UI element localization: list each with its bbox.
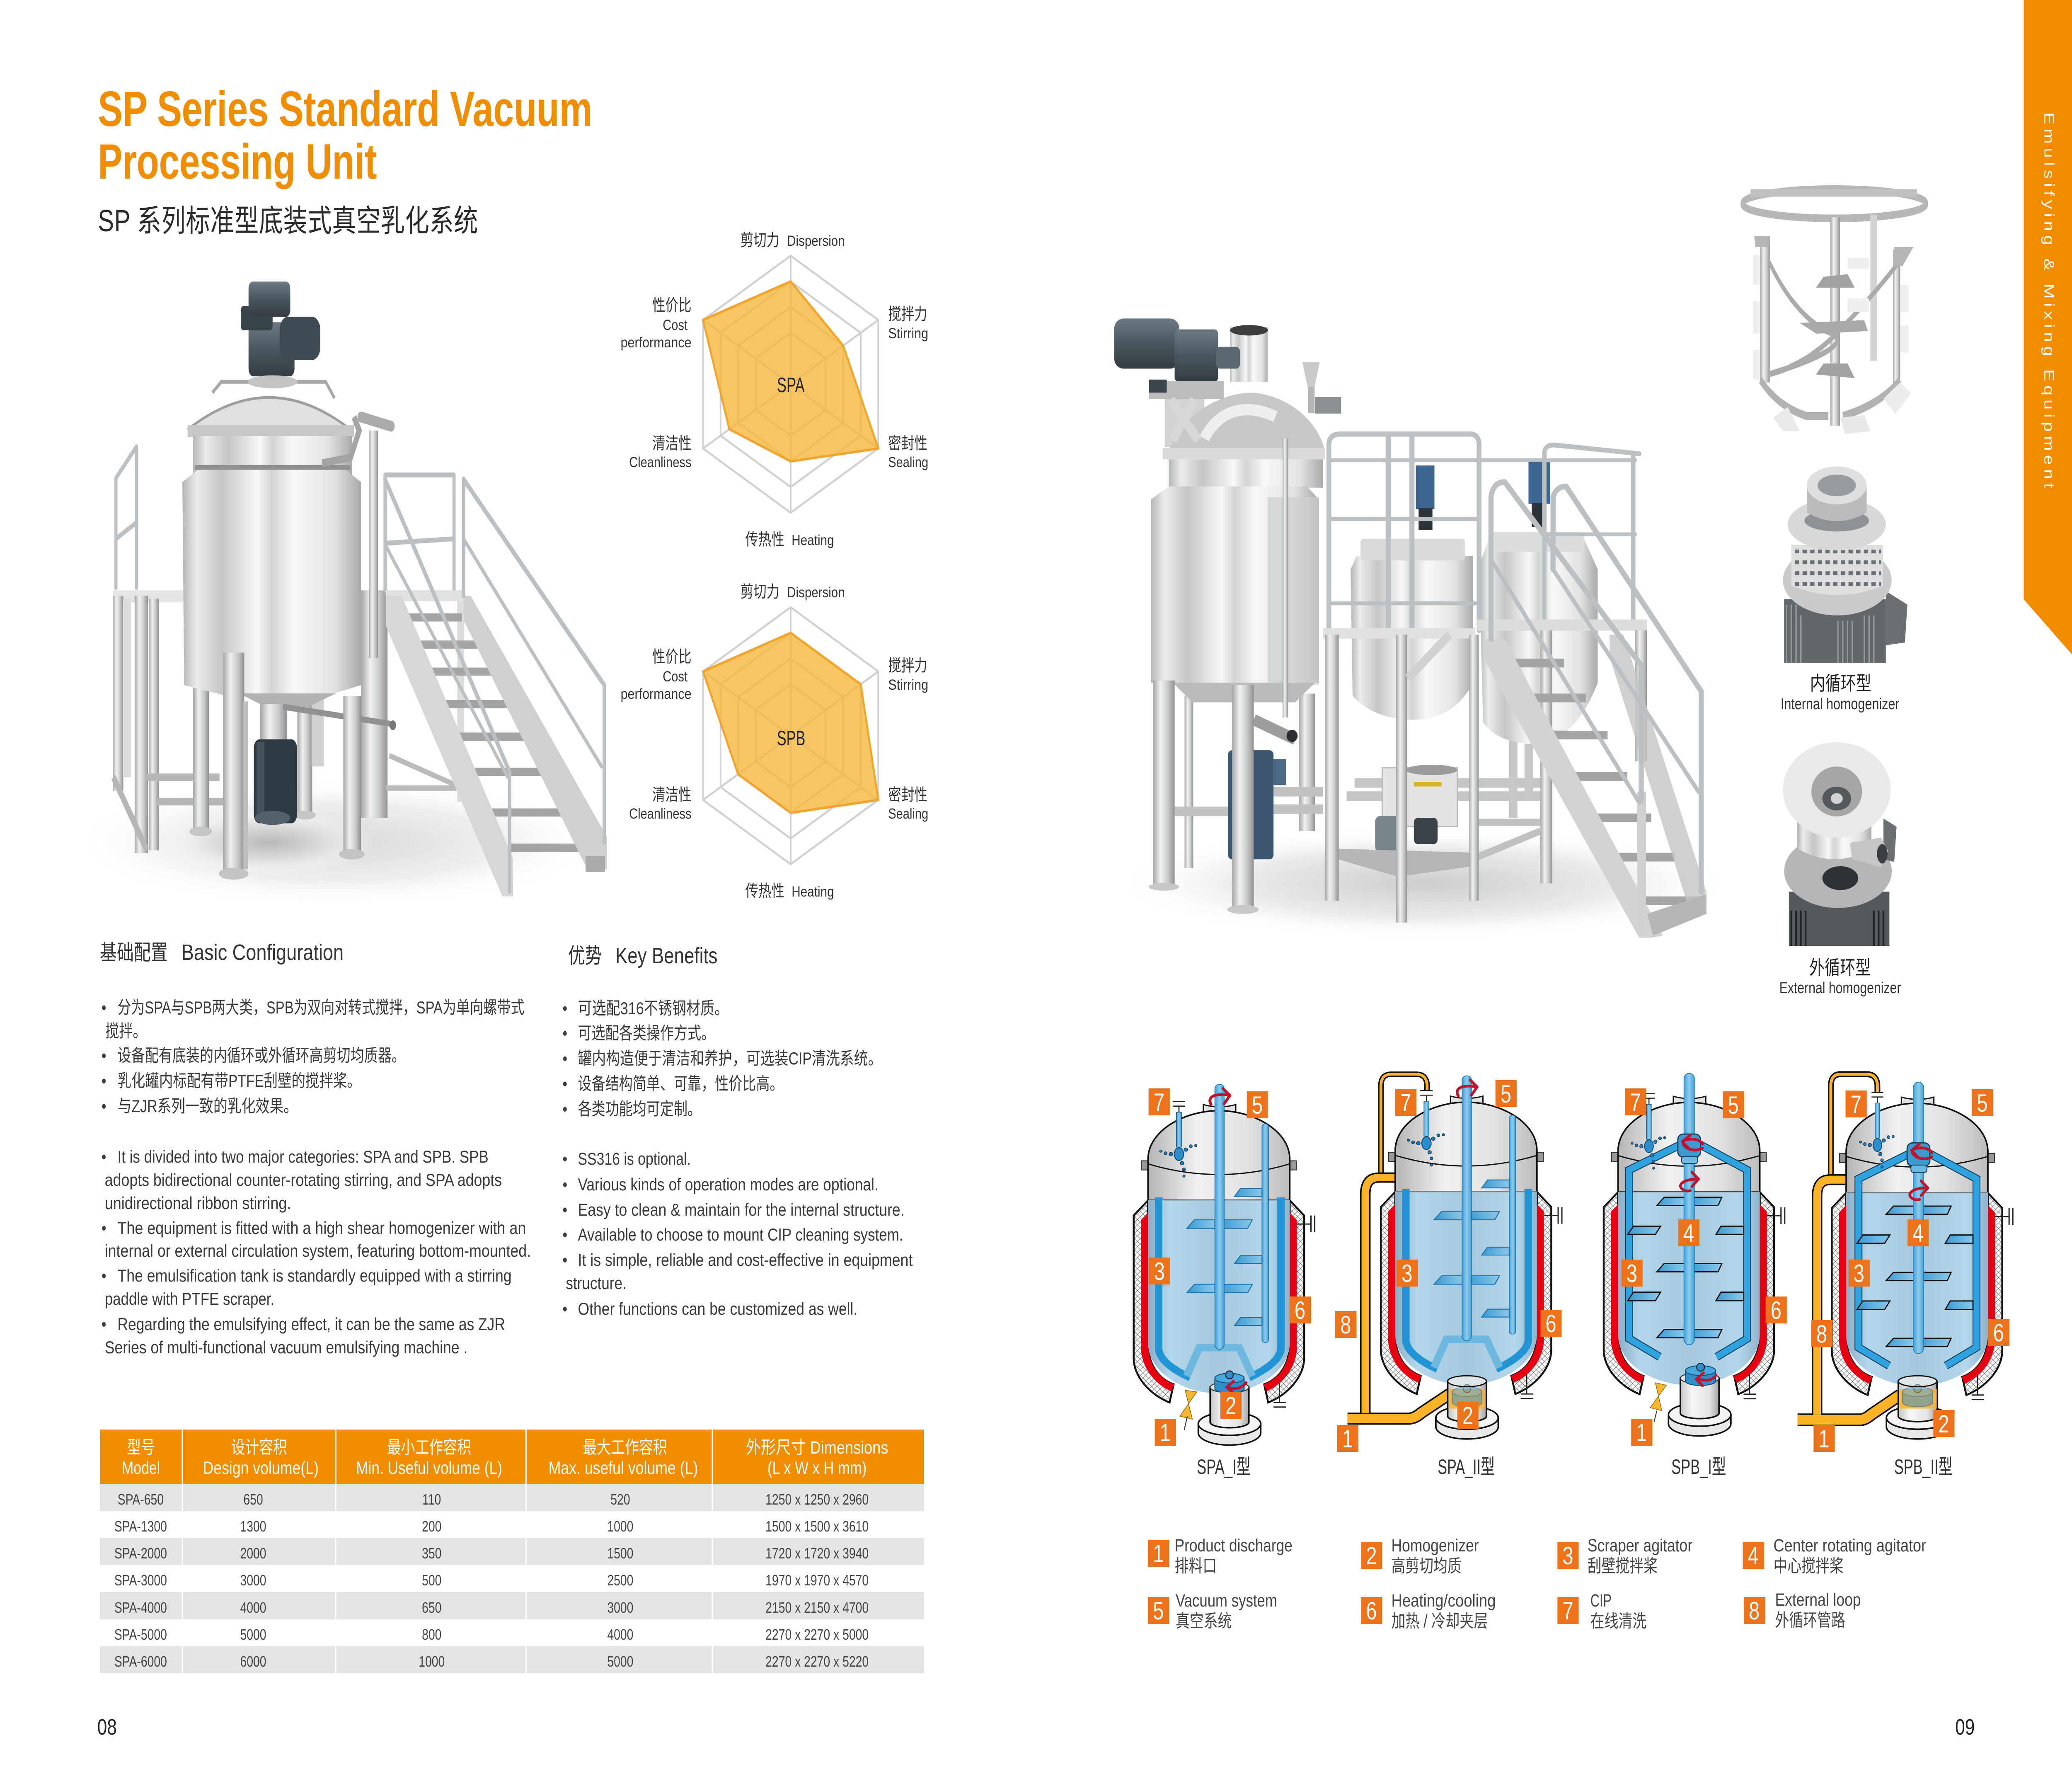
label SPA_I: SPA_I型 bbox=[1197, 1455, 1251, 1478]
table header: Design volume(L) bbox=[203, 1458, 319, 1478]
table row SPA-2000: 350 bbox=[422, 1545, 441, 1562]
axis labels SPA: Heating bbox=[792, 532, 834, 548]
text block: basic configuration Chinese: • bbox=[102, 1071, 106, 1091]
legend item 1 bbox=[1148, 1536, 1293, 1576]
text block: basic configuration English: The equipment is fitted with a high shear homogenizer with an bbox=[117, 1219, 526, 1238]
diagram: SPA_I bbox=[1134, 1084, 1315, 1478]
table row SPA-650: 650 bbox=[243, 1491, 263, 1508]
tank internals SPA_I bbox=[1159, 1084, 1281, 1445]
number tags SPB_II bbox=[1811, 1089, 2009, 1453]
number tags SPA_II: 1 bbox=[1342, 1425, 1353, 1453]
label SPA_II: SPA_II型 bbox=[1438, 1455, 1495, 1478]
number tags SPB_I: 4 bbox=[1683, 1220, 1694, 1247]
axis labels SPA: 清洁性 bbox=[652, 434, 692, 453]
text block: basic configuration Chinese: 乳化罐内标配有带PTFE刮壁的搅拌桨。 bbox=[117, 1071, 361, 1091]
text block: key benefits English: • bbox=[562, 1200, 567, 1220]
text block: key benefits Chinese: 设备结构简单、可靠，性价比高。 bbox=[578, 1074, 784, 1094]
number tags SPA_I: 2 bbox=[1225, 1392, 1236, 1420]
text block: basic configuration English bbox=[102, 1147, 531, 1357]
legend item 6: 6 bbox=[1366, 1597, 1377, 1625]
external loop pipe SPB_II bbox=[1798, 1074, 1900, 1420]
legend item 5: 5 bbox=[1153, 1597, 1164, 1625]
table row SPA-1300: 1300 bbox=[240, 1518, 266, 1535]
table row SPA-6000: 2270 x 2270 x 5220 bbox=[765, 1653, 869, 1670]
chart name SPA: SPA bbox=[777, 373, 805, 397]
table header: Min. Useful volume (L) bbox=[356, 1458, 502, 1478]
axis labels SPA: Cleanliness bbox=[629, 454, 692, 470]
axis labels SPB: Sealing bbox=[888, 805, 928, 822]
table row SPA-1300: 200 bbox=[422, 1518, 441, 1535]
number tags SPB_II: 8 bbox=[1816, 1321, 1827, 1348]
axis labels SPA: 密封性 bbox=[888, 434, 927, 453]
tank shell SPA_II bbox=[1381, 1096, 1562, 1398]
table row SPA-2000: 1720 x 1720 x 3940 bbox=[765, 1545, 869, 1562]
table row SPA-5000: SPA-5000 bbox=[114, 1626, 167, 1643]
legend item 2 bbox=[1361, 1536, 1479, 1576]
text block: key benefits English: • bbox=[562, 1149, 567, 1169]
number tags SPA_II bbox=[1335, 1080, 1562, 1453]
axis labels SPB: 传热性 bbox=[745, 881, 784, 900]
radar area SPA bbox=[703, 281, 878, 461]
label: internal homogenizer: 内循环型 bbox=[1810, 673, 1871, 694]
label: internal homogenizer: Internal homogenizer bbox=[1781, 695, 1899, 713]
legend item 6 bbox=[1361, 1591, 1496, 1631]
table header: 最大工作容积 bbox=[583, 1438, 667, 1458]
text block: key benefits Chinese: • bbox=[562, 1074, 567, 1094]
label SPB_II: SPB_II型 bbox=[1894, 1455, 1953, 1478]
axis labels SPB: Stirring bbox=[888, 676, 928, 693]
table header: 外形尺寸 Dimensions bbox=[746, 1438, 888, 1458]
heading: Key Benefits bbox=[568, 943, 717, 968]
text block: basic configuration English: paddle with PTFE scraper. bbox=[105, 1289, 274, 1309]
legend item 5 bbox=[1148, 1591, 1277, 1631]
chart name SPB: SPB bbox=[777, 726, 805, 750]
axis labels SPB: 搅拌力 bbox=[888, 656, 927, 675]
table row SPA-3000: SPA-3000 bbox=[114, 1572, 167, 1589]
table header: 设计容积 bbox=[231, 1438, 287, 1458]
table row SPA-4000 bbox=[114, 1599, 869, 1616]
table row SPA-4000: 3000 bbox=[607, 1599, 633, 1616]
text block: basic configuration English: unidirectional ribbon stirring. bbox=[105, 1194, 291, 1213]
legend item 7: CIP bbox=[1590, 1591, 1612, 1611]
legend item 7: 7 bbox=[1562, 1597, 1573, 1625]
tank shell SPA_I bbox=[1134, 1105, 1315, 1407]
tank shell SPB_I bbox=[1604, 1096, 1785, 1399]
text block: basic configuration English: • bbox=[102, 1219, 106, 1238]
table row backgrounds bbox=[100, 1484, 924, 1673]
number tags SPB_I: 7 bbox=[1630, 1089, 1641, 1116]
axis labels SPB: Dispersion bbox=[787, 584, 845, 601]
legend item 1: Product discharge bbox=[1175, 1536, 1293, 1556]
axis labels SPA bbox=[621, 230, 928, 549]
label: internal homogenizer bbox=[1781, 673, 1899, 713]
legend item 3: 3 bbox=[1562, 1542, 1573, 1570]
legend item 4: 中心搅拌桨 bbox=[1774, 1556, 1844, 1576]
table row SPA-3000: 3000 bbox=[240, 1572, 266, 1589]
table row SPA-3000 bbox=[114, 1572, 869, 1589]
specification table bbox=[100, 1430, 924, 1673]
axis labels SPB bbox=[621, 582, 928, 900]
radar chart: SPB bbox=[621, 582, 928, 900]
table header: 最小工作容积 bbox=[387, 1438, 471, 1458]
axis labels SPB: Cleanliness bbox=[629, 805, 692, 822]
number tags SPB_II: 4 bbox=[1912, 1220, 1923, 1247]
axis labels SPA: 性价比 bbox=[652, 296, 692, 315]
text block: key benefits Chinese: • bbox=[562, 1024, 567, 1043]
axis labels SPA: 传热性 bbox=[745, 530, 784, 549]
table row SPA-3000: 500 bbox=[422, 1572, 441, 1589]
axis labels SPA: 搅拌力 bbox=[888, 304, 927, 323]
tank internals SPB_II bbox=[1857, 1082, 1976, 1439]
number tags SPA_I: 3 bbox=[1154, 1258, 1165, 1285]
external loop pipe SPA_II bbox=[1348, 1074, 1450, 1419]
text block: key benefits English: Other functions can be customized as well. bbox=[578, 1299, 857, 1319]
number tags SPB_II: 5 bbox=[1977, 1090, 1988, 1117]
text block: key benefits English: • bbox=[562, 1299, 567, 1319]
text block: basic configuration Chinese: 与ZJR系列一致的乳化效果。 bbox=[117, 1097, 298, 1116]
number tags SPA_II: 7 bbox=[1400, 1089, 1411, 1117]
number tags SPA_I bbox=[1149, 1088, 1311, 1447]
text block: key benefits Chinese: 可选配316不锈钢材质。 bbox=[578, 999, 729, 1018]
legend item 6: Heating/cooling bbox=[1391, 1591, 1496, 1611]
number tags SPA_II: 3 bbox=[1402, 1260, 1412, 1287]
number tags SPB_I: 6 bbox=[1771, 1297, 1782, 1324]
text block: basic configuration Chinese: 分为SPA与SPB两大类，SPB为双向对转式搅拌，SPA为单向螺带式 bbox=[117, 998, 524, 1018]
table row SPA-6000: 5000 bbox=[607, 1653, 633, 1670]
axis labels SPB: 剪切力 bbox=[741, 582, 779, 601]
number tags SPB_II: 2 bbox=[1938, 1410, 1949, 1438]
legend item 7: 在线清洗 bbox=[1590, 1612, 1646, 1631]
diagram: SPA_II bbox=[1335, 1074, 1562, 1478]
legend item 8 bbox=[1744, 1590, 1861, 1631]
radar grid SPB bbox=[703, 607, 878, 864]
text block: basic configuration English: • bbox=[102, 1315, 106, 1334]
text block: key benefits Chinese: • bbox=[562, 1100, 567, 1119]
diagram: SPB_I bbox=[1604, 1073, 1787, 1478]
axis labels SPA: Sealing bbox=[888, 454, 928, 470]
table row SPA-650: 1250 x 1250 x 2960 bbox=[765, 1491, 869, 1508]
legend item 2: 高剪切均质 bbox=[1391, 1556, 1462, 1576]
title: SP Series Standard Vacuum bbox=[98, 81, 592, 137]
number tags SPB_I: 1 bbox=[1636, 1419, 1647, 1447]
text block: key benefits English: • bbox=[562, 1225, 567, 1245]
number tags SPB_I: 3 bbox=[1627, 1260, 1637, 1287]
heading: Basic Configuration: 基础配置 bbox=[100, 940, 168, 964]
text block: basic configuration Chinese: • bbox=[102, 1097, 106, 1116]
title bbox=[98, 81, 592, 189]
text block: key benefits English: structure. bbox=[566, 1274, 627, 1293]
table header bbox=[100, 1430, 924, 1484]
number tags SPB_II: 6 bbox=[1993, 1319, 2004, 1347]
table header: Model bbox=[122, 1458, 160, 1478]
text block: basic configuration Chinese: 搅拌。 bbox=[105, 1022, 147, 1041]
table row SPA-5000: 4000 bbox=[607, 1626, 633, 1643]
product photo: SP unit with side tanks and stairs bbox=[1113, 318, 1738, 940]
legend item 2: 2 bbox=[1366, 1542, 1377, 1570]
legend item 4: Center rotating agitator bbox=[1774, 1536, 1926, 1556]
side tab bbox=[2024, 0, 2072, 654]
radar chart: SPA bbox=[621, 230, 928, 549]
table row SPA-5000: 2270 x 2270 x 5000 bbox=[765, 1626, 869, 1643]
axis labels SPB: 清洁性 bbox=[652, 785, 692, 804]
text block: basic configuration English: The emulsification tank is standardly equipped with a stirring bbox=[117, 1266, 512, 1286]
table row SPA-4000: 650 bbox=[422, 1599, 441, 1616]
text block: key benefits Chinese: • bbox=[562, 1049, 567, 1069]
table row SPA-3000: 1970 x 1970 x 4570 bbox=[765, 1572, 869, 1589]
axis labels SPB: 密封性 bbox=[888, 785, 927, 804]
number tags SPA_I: 7 bbox=[1154, 1089, 1164, 1116]
axis labels SPA: performance bbox=[621, 334, 692, 351]
tank internals SPB_I bbox=[1628, 1073, 1747, 1436]
text block: basic configuration English: It is divided into two major categories: SPA and SPB. SPB bbox=[117, 1147, 489, 1167]
text block: key benefits Chinese: 可选配各类操作方式。 bbox=[578, 1024, 715, 1043]
legend item 7 bbox=[1557, 1591, 1646, 1631]
number tags SPA_II: 2 bbox=[1462, 1402, 1473, 1430]
legend item 8: External loop bbox=[1775, 1590, 1861, 1610]
table row SPA-1300: 1000 bbox=[607, 1518, 633, 1535]
label SPB_I: SPB_I型 bbox=[1671, 1455, 1726, 1478]
side tab label: Emulsifying & Mixing Equipment bbox=[2041, 112, 2057, 488]
legend item 8: 外循环管路 bbox=[1775, 1611, 1845, 1631]
legend bbox=[1148, 1536, 1926, 1631]
axis labels SPB: performance bbox=[621, 686, 692, 702]
table row SPA-5000: 800 bbox=[422, 1626, 441, 1643]
axis labels SPA: Stirring bbox=[888, 325, 928, 342]
legend item 4 bbox=[1743, 1536, 1926, 1576]
legend item 3 bbox=[1557, 1536, 1692, 1576]
table row SPA-6000: SPA-6000 bbox=[114, 1653, 167, 1670]
legend item 5: 真空系统 bbox=[1176, 1612, 1232, 1631]
text block: basic configuration English: Regarding the emulsifying effect, it can be the same as ZJR bbox=[117, 1315, 505, 1334]
number tags SPB_II: 3 bbox=[1854, 1260, 1864, 1287]
table row SPA-650 bbox=[118, 1491, 869, 1508]
text block: key benefits Chinese: 罐内构造便于清洁和养护，可选装CIP清洗系统。 bbox=[578, 1049, 882, 1069]
heading: Key Benefits: Key Benefits bbox=[615, 943, 717, 968]
product photo: agitator paddle bbox=[1742, 189, 1927, 434]
text block: key benefits English: SS316 is optional. bbox=[578, 1149, 691, 1169]
table header: Max. useful volume (L) bbox=[549, 1458, 698, 1478]
axis labels SPA: Cost bbox=[663, 317, 687, 333]
legend item 4: 4 bbox=[1748, 1542, 1759, 1570]
table row SPA-4000: 2150 x 2150 x 4700 bbox=[765, 1599, 869, 1616]
heading: Basic Configuration: Basic Configuration bbox=[182, 940, 344, 965]
text block: basic configuration English: • bbox=[102, 1266, 106, 1286]
number tags SPA_II: 8 bbox=[1340, 1311, 1351, 1339]
heading: Key Benefits: 优势 bbox=[568, 944, 602, 968]
product photo: internal homogenizer bbox=[1783, 466, 1907, 663]
axis labels SPB: Cost bbox=[663, 668, 687, 685]
number tags SPB_I: 5 bbox=[1728, 1092, 1739, 1119]
page number 08: 08 bbox=[97, 1715, 117, 1740]
product photo: external homogenizer bbox=[1783, 742, 1897, 946]
text block: key benefits English: Various kinds of operation modes are optional. bbox=[578, 1175, 879, 1195]
tank shell SPB_II bbox=[1832, 1097, 2013, 1400]
table row SPA-1300 bbox=[114, 1518, 869, 1535]
text block: key benefits English: Easy to clean & maintain for the internal structure. bbox=[578, 1200, 905, 1220]
title: Processing Unit bbox=[98, 133, 377, 189]
text block: basic configuration English: Series of multi-functional vacuum emulsifying machine . bbox=[105, 1338, 467, 1357]
number tags SPB_I bbox=[1622, 1088, 1787, 1447]
table row SPA-650: 520 bbox=[610, 1491, 630, 1508]
text block: basic configuration English: • bbox=[102, 1147, 106, 1167]
table row SPA-6000: 6000 bbox=[240, 1653, 266, 1670]
number tags SPA_II: 5 bbox=[1501, 1081, 1511, 1108]
table row SPA-650: SPA-650 bbox=[118, 1491, 164, 1508]
text block: key benefits English: • bbox=[562, 1175, 567, 1195]
legend item 3: 刮壁搅拌桨 bbox=[1588, 1556, 1658, 1576]
subtitle: SP 系列标准型底装式真空乳化系统 bbox=[98, 204, 478, 238]
legend item 8: 8 bbox=[1749, 1597, 1760, 1625]
axis labels SPA: 剪切力 bbox=[741, 230, 779, 250]
table row SPA-2000: 2000 bbox=[240, 1545, 266, 1562]
heading: Basic Configuration bbox=[100, 940, 344, 965]
diagram: SPB_II bbox=[1798, 1074, 2013, 1478]
text block: key benefits English: It is simple, reliable and cost-effective in equipment bbox=[578, 1250, 913, 1270]
text block: basic configuration Chinese: • bbox=[102, 1046, 106, 1066]
table header: 型号 bbox=[127, 1438, 155, 1458]
legend item 6: 加热 / 冷却夹层 bbox=[1391, 1612, 1488, 1631]
legend item 1: 排料口 bbox=[1175, 1556, 1217, 1576]
table header: (L x W x H mm) bbox=[767, 1458, 867, 1478]
legend item 1: 1 bbox=[1153, 1540, 1164, 1568]
axis labels SPA: Dispersion bbox=[787, 233, 845, 249]
number tags SPB_II: 1 bbox=[1818, 1425, 1830, 1453]
table row SPA-2000: 1500 bbox=[607, 1545, 633, 1562]
number tags SPB_II: 7 bbox=[1851, 1091, 1861, 1118]
label: external homogenizer: External homogenizer bbox=[1779, 979, 1901, 997]
text block: key benefits Chinese: 各类功能均可定制。 bbox=[578, 1100, 701, 1119]
table row SPA-6000 bbox=[114, 1653, 869, 1670]
axis labels SPB: 性价比 bbox=[652, 647, 692, 666]
table row SPA-2000: SPA-2000 bbox=[114, 1545, 167, 1562]
text block: key benefits English: Available to choose to mount CIP cleaning system. bbox=[578, 1225, 903, 1245]
table row SPA-2000 bbox=[114, 1545, 869, 1562]
radar area SPB bbox=[703, 633, 878, 813]
table row SPA-3000: 2500 bbox=[607, 1572, 633, 1589]
page number 09: 09 bbox=[1955, 1715, 1975, 1740]
text block: basic configuration Chinese: • bbox=[102, 998, 106, 1018]
number tags SPA_I: 1 bbox=[1160, 1419, 1171, 1447]
legend item 2: Homogenizer bbox=[1391, 1536, 1479, 1556]
legend item 5: Vacuum system bbox=[1176, 1591, 1277, 1611]
text block: key benefits Chinese bbox=[562, 999, 882, 1119]
text block: basic configuration Chinese: 设备配有底装的内循环或外循环高剪切均质器。 bbox=[117, 1046, 405, 1066]
text block: key benefits English bbox=[562, 1149, 913, 1319]
tank internals SPA_II bbox=[1406, 1076, 1528, 1439]
table row SPA-5000 bbox=[114, 1626, 869, 1643]
legend item 3: Scraper agitator bbox=[1588, 1536, 1692, 1556]
text block: basic configuration Chinese bbox=[102, 998, 524, 1116]
text block: key benefits Chinese: • bbox=[562, 999, 567, 1018]
axis labels SPB: Heating bbox=[792, 883, 834, 900]
table row SPA-4000: SPA-4000 bbox=[114, 1599, 167, 1616]
number tags SPA_II: 6 bbox=[1545, 1310, 1556, 1338]
table row SPA-650: 110 bbox=[422, 1491, 441, 1508]
table row SPA-5000: 5000 bbox=[240, 1626, 266, 1643]
table row SPA-1300: 1500 x 1500 x 3610 bbox=[765, 1518, 869, 1535]
number tags SPA_I: 5 bbox=[1252, 1092, 1263, 1119]
number tags SPA_I: 6 bbox=[1295, 1297, 1305, 1324]
table row SPA-4000: 4000 bbox=[240, 1599, 266, 1616]
text block: basic configuration English: internal or external circulation system, featuring bottom-mounted. bbox=[105, 1241, 531, 1261]
text block: basic configuration English: adopts bidirectional counter-rotating stirring, and SPA adopts bbox=[105, 1170, 502, 1190]
label: external homogenizer bbox=[1779, 957, 1901, 997]
text block: key benefits English: • bbox=[562, 1250, 567, 1270]
table row SPA-6000: 1000 bbox=[419, 1653, 445, 1670]
product photo: SP unit with stairs bbox=[68, 281, 607, 907]
label: external homogenizer: 外循环型 bbox=[1809, 957, 1871, 979]
table row SPA-1300: SPA-1300 bbox=[114, 1518, 167, 1535]
radar grid SPA bbox=[703, 256, 878, 513]
